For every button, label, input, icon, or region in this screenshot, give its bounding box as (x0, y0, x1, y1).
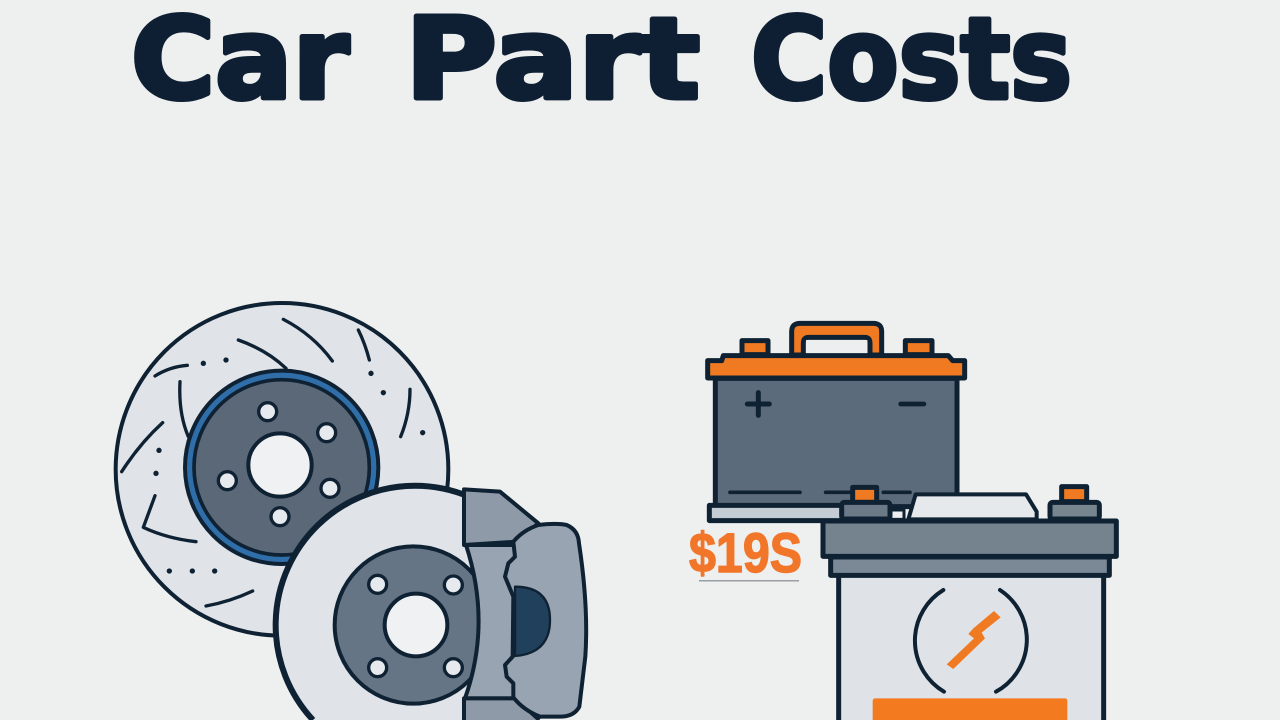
case detail lines (730, 487, 910, 498)
plus sign (747, 393, 769, 415)
rotor slots (122, 319, 410, 606)
top band (823, 521, 1116, 556)
caliper pad (505, 524, 586, 717)
vent cap (908, 494, 1037, 519)
left terminal (842, 487, 890, 519)
front lug holes (369, 575, 462, 677)
front rotor disc (276, 486, 554, 720)
battery body (839, 575, 1104, 720)
icon: back battery (708, 323, 965, 521)
piston (515, 587, 550, 656)
centre bore (248, 433, 312, 497)
price underline (699, 580, 799, 582)
base strip (709, 505, 843, 521)
minus sign (901, 397, 924, 411)
front centre bore (385, 594, 447, 656)
blue hub ring (185, 371, 378, 564)
caliper upper bracket (464, 489, 538, 545)
charge arcs (915, 590, 1027, 692)
title (131, 0, 1072, 125)
lightning bolt (947, 611, 1001, 669)
lid (708, 356, 965, 378)
second band (831, 557, 1109, 575)
orange label (873, 698, 1067, 720)
front hub (335, 546, 492, 704)
rotor disc (116, 303, 448, 636)
terminals (742, 341, 932, 355)
rotor hub (194, 380, 369, 555)
price label: $19S (689, 521, 802, 584)
lug holes (218, 403, 339, 526)
handle (792, 323, 882, 355)
small vent (891, 510, 904, 519)
caliper mid bracket (465, 545, 515, 698)
caliper lower bracket (464, 698, 539, 720)
icon: front brake rotor with caliper (276, 486, 586, 720)
right terminal (1050, 487, 1099, 519)
rotor drill holes (153, 357, 425, 574)
icon: back brake rotor (116, 303, 448, 636)
battery case (715, 378, 957, 507)
handle opening (806, 340, 867, 354)
icon: front battery (823, 487, 1116, 720)
